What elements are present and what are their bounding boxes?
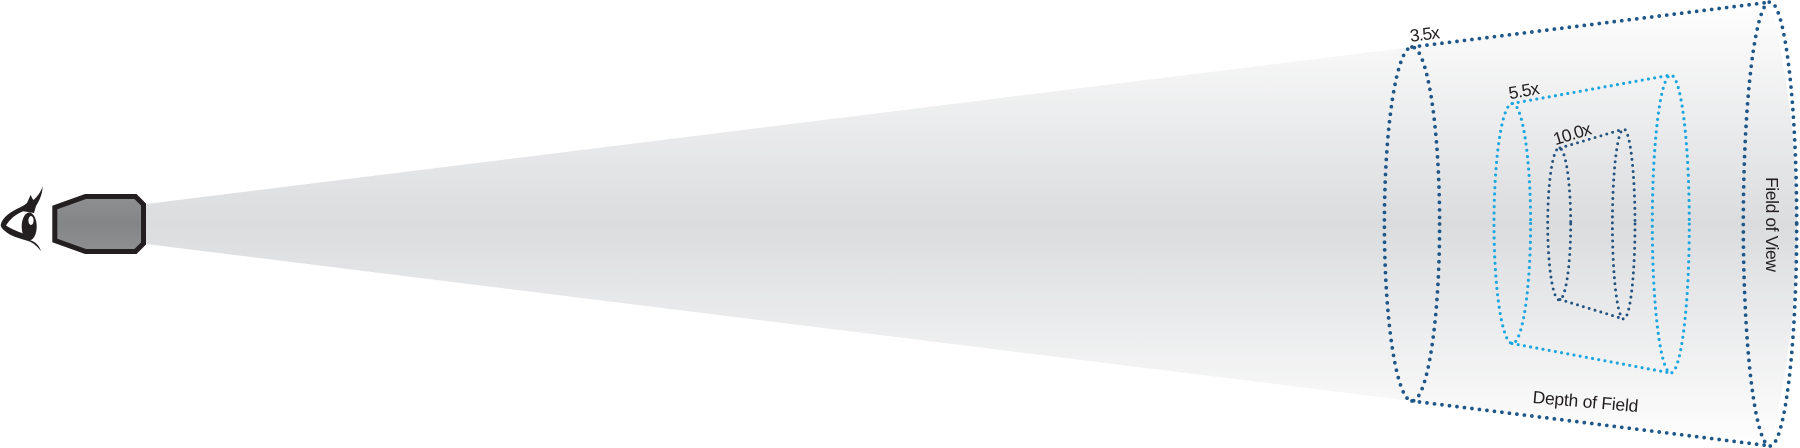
label: field of view: Field of View	[1762, 177, 1782, 272]
icon: eye	[1, 186, 43, 251]
label: 5.5x: 5.5x	[1507, 78, 1541, 103]
10.0x field outline	[1548, 129, 1635, 319]
3.5x field outline	[1384, 2, 1797, 446]
icon: camera body	[55, 196, 143, 252]
5.5x field outline	[1494, 75, 1689, 373]
eye highlight	[28, 216, 34, 225]
iris	[22, 212, 37, 240]
label: 3.5x: 3.5x	[1409, 22, 1441, 46]
label: depth of field: Depth of Field	[1532, 387, 1639, 416]
label: 10.0x: 10.0x	[1551, 118, 1594, 149]
